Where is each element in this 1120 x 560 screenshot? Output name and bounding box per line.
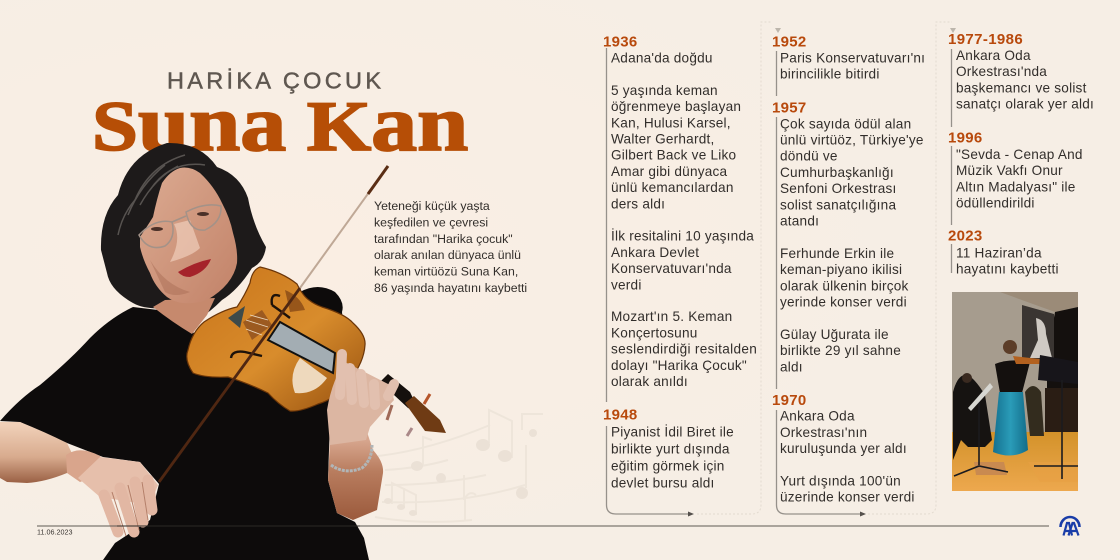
timeline column 3: ödüllendirildi <box>956 196 1035 211</box>
f-holes and bridge <box>272 295 290 318</box>
timeline column 1: eğitim görmek için <box>611 459 724 474</box>
timeline column 2: 1957 <box>772 99 807 116</box>
timeline column 3: 11 Haziran’da <box>956 245 1042 260</box>
timeline connector lines <box>606 22 956 516</box>
timeline column 3: 1977-1986 <box>948 31 1023 48</box>
timeline column 1: ders aldı <box>611 196 665 211</box>
timeline column 2: yerinde konser verdi <box>780 294 907 310</box>
timeline column 1: öğrenmeye başlayan <box>611 99 741 114</box>
timeline column 2: Yurt dışında 100'ün <box>780 474 901 488</box>
timeline column 2: Ankara Oda <box>780 409 855 424</box>
timeline column 2: ünlü virtüöz, Türkiye'ye <box>780 132 924 148</box>
timeline column 1: dolayı "Harika Çocuk" <box>611 358 747 373</box>
timeline column 1: Kan, Hulusi Karsel, <box>611 115 731 130</box>
timeline column 2: Çok sayıda ödül alan <box>780 116 911 131</box>
timeline column 1: Piyanist İdil Biret ile <box>611 425 734 440</box>
timeline column 3: Ankara Oda <box>956 48 1031 63</box>
timeline column 3: Altın Madalyası" ile <box>956 179 1076 194</box>
timeline column 2: Cumhurbaşkanlığı <box>780 165 894 180</box>
timeline column 2: döndü ve <box>780 149 838 164</box>
timeline column 3: sanatçı olarak yer aldı <box>956 97 1094 112</box>
timeline column 1: verdi <box>611 277 642 292</box>
timeline column 1: devlet bursu aldı <box>611 476 714 491</box>
intro text <box>374 199 527 295</box>
timeline column 2: 1970 <box>772 392 807 409</box>
dress <box>0 287 369 560</box>
timeline column 3: hayatını kaybetti <box>956 262 1059 276</box>
intro text: keman virtüözü Suna Kan, <box>374 265 518 279</box>
timeline column 2: Paris Konservatuvarı'nı <box>780 50 925 66</box>
timeline column 1 <box>603 34 757 491</box>
timeline column 2: birlikte 29 yıl sahne <box>780 343 901 358</box>
timeline column 1: 1936 <box>603 34 638 51</box>
timeline column 1: Ankara Devlet <box>611 245 699 260</box>
timeline column 2: solist sanatçılığına <box>780 197 896 212</box>
timeline column 3: Orkestrası'nda <box>956 64 1047 79</box>
face <box>140 168 237 303</box>
timeline column 1: Walter Gerhardt, <box>611 132 714 146</box>
right arm <box>328 426 383 520</box>
date: 11.06.2023 <box>37 528 72 536</box>
left arm <box>0 422 80 483</box>
timeline column 2: olarak ülkenin birçok <box>780 278 909 293</box>
timeline column 1: 5 yaşında keman <box>611 83 718 98</box>
timeline column 3: "Sevda - Cenap And <box>956 147 1083 162</box>
timeline column 3: 2023 <box>948 228 983 245</box>
bow <box>159 288 300 482</box>
right hand <box>327 354 394 445</box>
timeline column 1: ünlü kemancılardan <box>611 180 734 195</box>
music stands <box>1038 355 1078 384</box>
left hand <box>66 450 158 536</box>
timeline column 3: başkemancı ve solist <box>956 80 1087 95</box>
timeline column 2 <box>772 34 925 505</box>
neck <box>153 298 215 334</box>
timeline column 2: atandı <box>780 214 819 228</box>
intro text: Yeteneği küçük yaşta <box>374 199 490 213</box>
timeline column 2: keman-piyano ikilisi <box>780 262 902 277</box>
timeline column 1: Adana'da doğdu <box>611 50 713 66</box>
violin body <box>187 267 365 411</box>
timeline column 2: 1952 <box>772 34 807 51</box>
timeline column 1: olarak anıldı <box>611 374 688 389</box>
timeline column 1: seslendirdiği resitalden <box>611 342 757 357</box>
soloist <box>1003 340 1017 354</box>
title: Suna Kan: Suna Kan <box>92 80 468 168</box>
intro text: keşfedilen ve çevresi <box>374 215 488 229</box>
timeline column 1: Konçertosunu <box>611 325 698 340</box>
timeline column 3: 1996 <box>948 129 983 146</box>
timeline column 1: 1948 <box>603 406 638 423</box>
timeline column 2: aldı <box>780 359 803 374</box>
hair <box>101 143 266 318</box>
timeline column 2: üzerinde konser verdi <box>780 490 915 505</box>
timeline column 1: Konservatuvarı'nda <box>611 261 732 276</box>
music notes decoration <box>375 410 543 522</box>
subtitle: Harika Çocuk: HARİKA ÇOCUK <box>167 68 381 94</box>
seated musicians <box>953 375 992 460</box>
intro text: tarafından "Harika çocuk" <box>374 232 513 246</box>
timeline column 1: Mozart'ın 5. Keman <box>611 309 732 324</box>
timeline column 1: Gilbert Back ve Liko <box>611 148 736 163</box>
concert photo <box>952 292 1078 491</box>
tuning pegs <box>387 394 430 436</box>
timeline column 2: Senfoni Orkestrası <box>780 181 897 196</box>
bracelet <box>331 445 372 471</box>
timeline column 2: Gülay Uğurata ile <box>780 327 889 342</box>
intro text: olarak anılan dünyaca ünlü <box>374 248 521 262</box>
glasses <box>139 205 221 248</box>
timeline column 2: kuruluşunda yer aldı <box>780 441 907 456</box>
timeline column 1: Amar gibi dünyaca <box>611 164 728 179</box>
timeline column 3 <box>948 31 1094 276</box>
eyes and mouth <box>151 227 163 231</box>
intro text: 86 yaşında hayatını kaybetti <box>374 281 527 295</box>
portrait of Suna Kan with violin <box>0 143 446 560</box>
timeline column 1: birlikte yurt dışında <box>611 442 730 457</box>
footer rule <box>37 525 1049 527</box>
fingerboard and neck <box>268 322 335 373</box>
icon: AA logo <box>1060 517 1080 536</box>
timeline column 2: birincilikle bitirdi <box>780 67 880 82</box>
timeline column 3: Müzik Vakfı Onur <box>956 163 1063 178</box>
timeline column 1: İlk resitalini 10 yaşında <box>611 229 754 244</box>
timeline column 2: Orkestrası'nın <box>780 425 867 440</box>
timeline column 2: Ferhunde Erkin ile <box>780 246 894 261</box>
